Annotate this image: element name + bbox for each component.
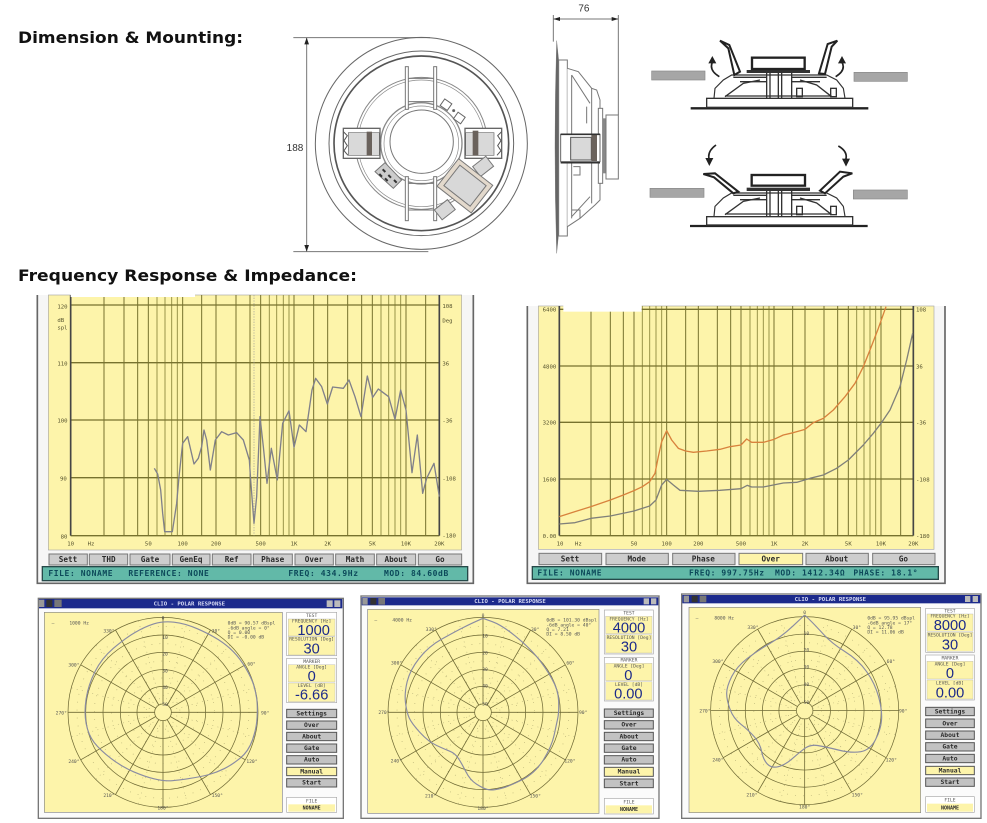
toolbar buttons: Over xyxy=(305,555,324,564)
polar labels: 40 xyxy=(804,682,809,688)
side buttons: Over xyxy=(942,720,958,727)
polar labels: 50 xyxy=(804,700,809,706)
polar labels: -6dB angle = 40° xyxy=(546,622,591,628)
polar labels: 60° xyxy=(247,662,256,668)
title bar xyxy=(39,599,342,608)
side buttons: Settings xyxy=(296,709,327,717)
test readout: TEST xyxy=(623,611,635,617)
toolbar buttons: Go xyxy=(899,555,908,564)
polar trace xyxy=(405,618,559,790)
title bar xyxy=(362,597,658,605)
diagram: mounting clip steps xyxy=(650,41,907,226)
test readout: 30 xyxy=(942,637,958,653)
window frame xyxy=(682,594,981,818)
marker readout: 0 xyxy=(946,666,954,682)
polar labels: 210° xyxy=(425,793,436,799)
axis labels: 20K xyxy=(908,542,919,548)
toolbar buttons: THD xyxy=(102,555,116,564)
axis labels: 36 xyxy=(916,364,923,370)
polar labels: 120° xyxy=(886,757,897,763)
polar labels: 270° xyxy=(378,710,390,716)
plot background xyxy=(44,612,282,812)
axis labels: 10 xyxy=(67,542,75,548)
polar labels: -6dB angle = 0° xyxy=(228,625,270,631)
axis labels: 4800 xyxy=(543,364,557,370)
axis labels: 120 xyxy=(57,305,68,311)
file box: NONAME xyxy=(303,806,321,812)
marker readout: LEVEL [dB] xyxy=(936,681,964,687)
polar labels: 10 xyxy=(804,631,809,637)
polar labels: 240° xyxy=(712,757,724,763)
side buttons: Auto xyxy=(621,757,637,764)
side buttons: Start xyxy=(302,780,321,787)
axis labels: 10K xyxy=(876,542,887,548)
polar labels: 30° xyxy=(853,625,861,631)
status bar: MOD: 84.60dB xyxy=(384,569,449,578)
polar labels: 0dB = 90.57 dBspl xyxy=(228,621,276,627)
axis labels: Hz xyxy=(575,542,582,548)
status bar: PHASE: 18.1° xyxy=(853,569,918,578)
side buttons xyxy=(926,707,974,786)
response trace xyxy=(154,376,439,532)
polar labels: 0dB = 95.95 dBspl xyxy=(867,616,915,622)
axis labels: 200 xyxy=(693,542,704,548)
axis labels: 108 xyxy=(442,304,453,310)
side buttons: Start xyxy=(940,779,960,786)
status bar xyxy=(532,567,938,579)
toolbar buttons: Phase xyxy=(692,555,715,564)
polar labels: 270° xyxy=(56,710,67,716)
axis labels xyxy=(543,308,930,548)
axis labels: 6400 xyxy=(543,308,557,314)
status bar: FILE: NONAME xyxy=(48,569,113,578)
axis labels: 1K xyxy=(771,542,778,548)
side buttons: Manual xyxy=(618,769,641,776)
window frame xyxy=(37,295,473,583)
axis labels: -108 xyxy=(916,477,930,483)
polar labels: 0dB = 101.30 dBspl xyxy=(546,618,597,624)
polar labels: 120° xyxy=(564,759,576,765)
side buttons: Gate xyxy=(304,745,319,752)
polar labels: 10 xyxy=(482,634,488,640)
marker readout: 0 xyxy=(308,669,316,685)
polar labels: 20 xyxy=(804,648,809,654)
dimension: depth 76 xyxy=(553,4,618,115)
file box: FILE xyxy=(306,798,317,804)
mounting clip right xyxy=(465,128,502,158)
axis labels: 80 xyxy=(61,534,68,540)
test readout: 4000 xyxy=(613,621,645,637)
file box xyxy=(926,797,974,812)
polar labels: 20 xyxy=(162,652,168,658)
marker readout: ANGLE [Deg] xyxy=(935,661,965,667)
polar labels: 180° xyxy=(799,805,810,811)
polar labels: 90° xyxy=(261,710,270,716)
status bar: FREQ: 997.75Hz xyxy=(689,569,765,578)
transformer block xyxy=(434,156,494,220)
polar labels: 60° xyxy=(566,661,575,667)
side buttons: About xyxy=(940,732,960,739)
polar labels: 180° xyxy=(477,806,489,812)
polar labels: 330° xyxy=(747,625,759,631)
axis labels: 2K xyxy=(802,542,809,548)
axis labels: 100 xyxy=(57,419,68,425)
polar trace xyxy=(727,615,882,767)
heading: frequency response and impedance: Frequency Response & Impedance: xyxy=(18,266,357,285)
polar labels: 40 xyxy=(482,684,488,690)
test readout: TEST xyxy=(944,609,956,615)
side buttons: Over xyxy=(621,722,637,729)
polar labels: DI = 11.06 dB xyxy=(867,630,904,636)
polar labels: Q = 0.00 xyxy=(228,630,250,636)
test readout: FREQUENCY [Hz] xyxy=(930,614,970,620)
file box: NONAME xyxy=(620,807,638,813)
test readout: TEST xyxy=(306,613,317,619)
toolbar buttons: Phase xyxy=(261,555,285,564)
polar labels: 30° xyxy=(531,627,540,633)
test readout: FREQUENCY [Hz] xyxy=(292,619,331,625)
marker readout: ANGLE [Deg] xyxy=(296,664,327,670)
polar window: 8000 Hz xyxy=(682,594,981,818)
plot background xyxy=(689,607,921,813)
white top notch xyxy=(563,305,642,312)
mounting clip left xyxy=(343,128,380,158)
toolbar buttons: Go xyxy=(435,555,445,564)
polar labels: 300° xyxy=(391,661,402,667)
test readout: RESOLUTION [Deg] xyxy=(289,637,334,643)
axis labels: Hz xyxy=(88,542,94,548)
axis labels: 500 xyxy=(256,542,266,548)
axis labels: 20K xyxy=(434,542,445,548)
side buttons: Settings xyxy=(935,707,965,715)
status bar: MOD: 1412.34Ω xyxy=(775,569,845,578)
side buttons: About xyxy=(302,733,321,740)
polar labels: 10 xyxy=(162,635,168,641)
grid lines xyxy=(559,306,913,536)
test readout: FREQUENCY [Hz] xyxy=(609,616,649,622)
file box: FILE xyxy=(944,798,956,804)
status bar: FREQ: 434.9Hz xyxy=(288,569,359,578)
axis labels: dB xyxy=(57,318,65,324)
test readout: RESOLUTION [Deg] xyxy=(607,635,651,641)
polar labels: 30° xyxy=(212,629,220,635)
polar labels: 210° xyxy=(746,793,758,799)
toolbar buttons: Ref xyxy=(225,555,239,564)
axis labels: 3200 xyxy=(543,421,557,427)
marker readout xyxy=(604,657,653,703)
dimension: depth 76: 76 xyxy=(578,4,590,15)
polar labels: 0 xyxy=(482,613,485,619)
side buttons: Settings xyxy=(614,709,644,717)
file box xyxy=(287,797,337,812)
polar labels xyxy=(374,613,597,812)
plot background xyxy=(368,609,599,813)
axis labels xyxy=(57,304,457,548)
side buttons xyxy=(287,709,337,787)
speaker rings xyxy=(315,37,527,249)
polar labels xyxy=(52,615,276,812)
polar labels: 0 xyxy=(803,610,806,616)
toolbar buttons: Sett xyxy=(561,555,580,564)
axis labels: 200 xyxy=(211,542,222,548)
polar labels: 150° xyxy=(852,793,863,799)
polar labels: DI = 8.50 dB xyxy=(546,632,580,638)
toolbar buttons: About xyxy=(825,555,849,564)
marker readout: LEVEL [dB] xyxy=(615,682,643,688)
polar labels: 30 xyxy=(804,665,809,671)
status bar xyxy=(42,567,468,581)
polar labels: Q = 12.78 xyxy=(867,625,893,631)
grid lines xyxy=(71,295,439,536)
axis labels: 100 xyxy=(662,542,672,548)
chart panel: frequency response xyxy=(37,294,473,583)
polar labels: 20 xyxy=(482,650,488,656)
polar labels: 210° xyxy=(103,793,115,799)
polar labels: — xyxy=(374,619,377,624)
title bar: CLIO - POLAR RESPONSE xyxy=(474,599,546,605)
polar labels: 90° xyxy=(579,710,588,716)
marker readout: MARKER xyxy=(942,656,959,662)
polar grid xyxy=(711,617,899,805)
marker readout: 0 xyxy=(624,668,632,684)
terminal block bottom xyxy=(375,163,402,188)
toolbar buttons: About xyxy=(384,555,408,564)
axis labels: 100 xyxy=(178,542,188,548)
polar labels: 30 xyxy=(162,669,168,675)
test readout: 8000 xyxy=(934,618,966,634)
polar labels: 240° xyxy=(68,759,80,765)
marker readout xyxy=(926,655,974,701)
status bar: FILE: NONAME xyxy=(537,569,602,578)
side buttons: Manual xyxy=(300,768,323,775)
axis labels: 110 xyxy=(57,361,68,367)
side buttons: About xyxy=(619,733,639,740)
polar grid xyxy=(68,617,258,807)
toolbar buttons: Math xyxy=(346,555,364,564)
side profile xyxy=(555,41,618,253)
toolbar buttons xyxy=(49,554,462,565)
file box xyxy=(604,798,653,814)
window frame xyxy=(38,598,343,818)
marker readout xyxy=(287,658,337,703)
polar labels: 150° xyxy=(530,793,541,799)
marker readout: MARKER xyxy=(621,658,638,664)
polar labels: 40 xyxy=(162,685,168,691)
polar labels: 8000 Hz xyxy=(714,616,734,622)
plot background xyxy=(48,295,462,550)
grey phase trace xyxy=(559,333,913,524)
axis labels: 500 xyxy=(736,542,747,548)
title bar xyxy=(682,595,980,603)
polar labels: 30 xyxy=(482,667,488,673)
test readout: 30 xyxy=(304,642,320,658)
polar window: 1000 Hz xyxy=(38,598,343,818)
polar labels: -6dB angle = 17° xyxy=(867,620,912,626)
dimension: height 188: 188 xyxy=(287,143,304,154)
plot background xyxy=(538,306,934,549)
window frame xyxy=(361,596,659,818)
axis labels: -180 xyxy=(916,534,930,540)
polar labels: 50 xyxy=(162,702,168,708)
test readout: 30 xyxy=(621,640,637,656)
axis labels: 5K xyxy=(369,542,376,548)
polar labels: 1000 Hz xyxy=(69,621,89,627)
axis labels: 10K xyxy=(401,542,412,548)
axis labels: 1600 xyxy=(543,477,557,483)
title bar: CLIO - POLAR RESPONSE xyxy=(154,602,226,608)
axis labels: 50 xyxy=(145,542,152,548)
white top notch xyxy=(71,294,195,297)
polar labels: — xyxy=(52,622,55,627)
axis labels: 108 xyxy=(916,308,927,314)
side buttons: Start xyxy=(619,780,639,787)
window frame xyxy=(527,306,945,583)
polar labels: 50 xyxy=(482,701,488,707)
polar labels: 4000 Hz xyxy=(392,618,412,624)
polar labels: 270° xyxy=(699,708,711,714)
polar labels: 120° xyxy=(246,759,258,765)
terminal block top xyxy=(440,99,465,124)
axis labels: 10 xyxy=(557,542,564,548)
marker readout: ANGLE [Deg] xyxy=(614,663,644,669)
status bar: REFERENCE: NONE xyxy=(128,569,209,578)
side buttons: Auto xyxy=(304,757,319,764)
side buttons: Manual xyxy=(939,767,962,774)
polar labels: 240° xyxy=(391,759,402,765)
polar labels: 150° xyxy=(212,793,223,799)
marker readout: MARKER xyxy=(303,659,320,665)
polar labels: 300° xyxy=(68,663,80,669)
test readout: RESOLUTION [Deg] xyxy=(928,632,972,638)
chart panel: impedance xyxy=(527,305,945,583)
polar labels: 90° xyxy=(899,708,908,714)
marker readout: -6.66 xyxy=(295,687,328,703)
axis labels: 36 xyxy=(442,361,450,367)
axis labels: 50 xyxy=(631,542,638,548)
toolbar buttons xyxy=(539,553,935,565)
polar labels: 0 xyxy=(162,615,165,621)
polar labels: Q = 7.21 xyxy=(546,627,569,633)
test readout: 1000 xyxy=(297,623,330,639)
axis labels: 1K xyxy=(291,542,298,548)
heading: dimension and mounting: Dimension & Mounting: xyxy=(18,28,243,47)
axis labels: -36 xyxy=(442,419,453,425)
toolbar buttons: Over xyxy=(761,555,780,564)
marker readout: 0.00 xyxy=(614,687,643,703)
vertical clip rails xyxy=(405,67,437,221)
side buttons: Auto xyxy=(942,755,958,762)
axis labels: 0.00 xyxy=(543,534,557,540)
file box: FILE xyxy=(623,799,635,805)
dimension: height 188 xyxy=(287,38,430,252)
marker readout: 0.00 xyxy=(936,685,964,701)
side buttons: Gate xyxy=(942,744,958,751)
toolbar buttons: GenEq xyxy=(179,555,203,564)
polar labels: 180° xyxy=(157,806,169,812)
toolbar buttons: Gate xyxy=(141,555,160,564)
polar labels xyxy=(696,610,915,811)
axis labels: -108 xyxy=(442,476,457,482)
polar labels: 330° xyxy=(103,629,115,635)
polar labels: 330° xyxy=(426,627,437,633)
axis labels: 2K xyxy=(324,542,332,548)
orange impedance trace xyxy=(559,307,886,517)
step: clips raised xyxy=(652,41,907,108)
toolbar buttons: Mode xyxy=(627,555,646,564)
axis labels: spl xyxy=(57,325,68,331)
axis labels: 5K xyxy=(845,542,852,548)
axis labels: -180 xyxy=(442,534,457,540)
marker readout: LEVEL [dB] xyxy=(298,683,326,689)
side buttons: Over xyxy=(304,722,319,729)
file box: NONAME xyxy=(941,805,959,811)
axis labels: Deg xyxy=(442,318,453,324)
toolbar buttons: Sett xyxy=(59,555,78,564)
polar window: 4000 Hz xyxy=(361,596,659,818)
test readout xyxy=(604,610,653,656)
axis labels: -36 xyxy=(916,421,927,427)
diagram: speaker front view with 188 dimension xyxy=(287,37,527,252)
test readout xyxy=(926,608,974,653)
polar labels: 300° xyxy=(712,659,724,665)
polar grid xyxy=(388,617,578,807)
side buttons xyxy=(604,709,653,788)
diagram: speaker side view with 76 dimension xyxy=(553,4,618,253)
polar trace xyxy=(85,622,257,781)
axis labels: 90 xyxy=(60,476,67,482)
polar labels: DI = -0.00 dB xyxy=(228,635,264,641)
test readout xyxy=(287,612,337,658)
side buttons: Gate xyxy=(621,745,637,752)
polar labels: 60° xyxy=(887,659,895,665)
title bar: CLIO - POLAR RESPONSE xyxy=(795,597,867,603)
step: clips lowered xyxy=(650,145,907,226)
polar labels: — xyxy=(696,617,699,622)
